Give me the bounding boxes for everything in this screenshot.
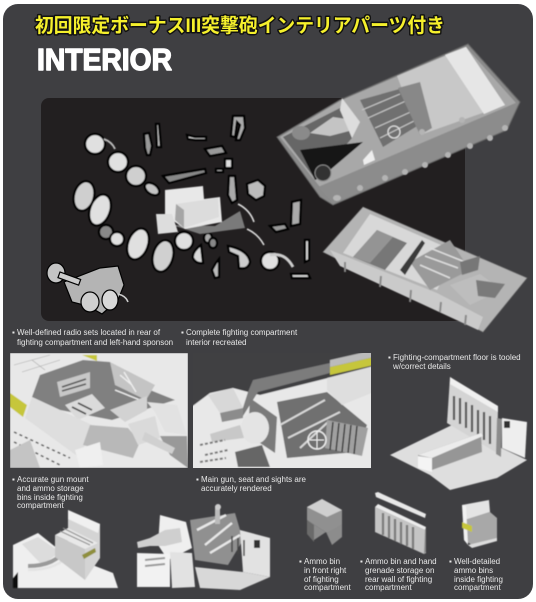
caption: radio sets: fighting compartment and left-hand sponson — [17, 338, 173, 347]
photo: radio sets — [10, 353, 188, 468]
caption: complete compartment: Complete fighting compartment — [186, 328, 298, 337]
title: Japanese: 初回限定ボーナスIII突撃砲インテリアパーツ付き — [35, 15, 445, 37]
caption: floor details: ▪ — [388, 353, 391, 362]
caption: gun mount: bins inside fighting — [17, 493, 83, 502]
caption: floor details — [388, 353, 521, 371]
caption: well-detailed bins: ammo bins — [454, 566, 493, 575]
caption: radio sets — [12, 328, 173, 347]
caption: ammo bin and hand grenade: ▪ — [360, 557, 363, 566]
main block — [172, 211, 245, 234]
caption: ammo bin and hand grenade: compartment — [365, 583, 412, 592]
caption: floor details: w/correct details — [392, 362, 451, 371]
render: well-detailed ammo bins — [462, 500, 497, 548]
render: gun, seat and sights — [137, 504, 270, 590]
caption: floor details: Fighting-compartment floor is tooled — [393, 353, 521, 362]
left side dark engine — [283, 108, 352, 180]
caption: well-detailed bins — [449, 557, 503, 592]
caption: gun mount: Accurate gun mount — [17, 475, 89, 484]
title: INTERIOR: INTERIOR — [37, 42, 172, 77]
caption: radio sets: Well-defined radio sets located in rear of — [17, 328, 161, 337]
caption: well-detailed bins: Well-detailed — [454, 557, 500, 566]
caption: ammo bin front right: compartment — [304, 583, 351, 592]
render: gun mount and ammo bins — [13, 510, 118, 588]
caption: main gun: Main gun, seat and sights are — [201, 475, 307, 484]
caption: ammo bin and hand grenade: rear wall of fighting — [365, 575, 432, 584]
caption: ammo bin front right: ▪ — [299, 557, 302, 566]
photo: fighting compartment — [190, 350, 374, 470]
caption: ammo bin and hand grenade: grenade storage on — [365, 566, 434, 575]
caption: ammo bin front right: in front right — [304, 566, 347, 575]
parts: engine and transmission assembly — [47, 263, 128, 314]
render: fighting-compartment floor — [390, 377, 527, 490]
render: ammo bin and grenade storage — [375, 492, 426, 554]
dark parts panel — [41, 98, 465, 321]
caption: complete compartment: interior recreated — [186, 338, 246, 347]
centre interior — [360, 88, 427, 147]
caption: complete compartment: ▪ — [181, 328, 184, 337]
caption: ammo bin and hand grenade: Ammo bin and hand — [365, 557, 437, 566]
caption: gun mount: ▪ — [12, 475, 15, 484]
caption: ammo bin and hand grenade — [360, 557, 437, 592]
separate parts layout — [70, 116, 310, 278]
caption: ammo bin front right — [299, 557, 351, 592]
caption: gun mount — [12, 475, 89, 510]
gun — [310, 117, 353, 136]
caption: well-detailed bins: inside fighting — [454, 575, 503, 584]
caption: main gun — [196, 475, 307, 493]
render: ammo bin, front right — [307, 499, 342, 545]
hull render: top view — [277, 44, 520, 205]
caption: gun mount: compartment — [17, 501, 64, 510]
caption: ammo bin front right: Ammo bin — [304, 557, 340, 566]
floor at the rear — [397, 47, 505, 135]
road wheel mounts — [333, 117, 508, 201]
caption: gun mount: and ammo storage — [17, 484, 84, 493]
caption: radio sets: ▪ — [12, 328, 15, 337]
caption: well-detailed bins: ▪ — [449, 557, 452, 566]
caption: main gun: accurately rendered — [201, 484, 272, 493]
caption: complete compartment — [181, 328, 298, 347]
caption: well-detailed bins: compartment — [454, 583, 501, 592]
caption: main gun: ▪ — [196, 475, 199, 484]
hull render: underside view — [323, 207, 527, 332]
caption: ammo bin front right: of fighting — [304, 575, 339, 584]
